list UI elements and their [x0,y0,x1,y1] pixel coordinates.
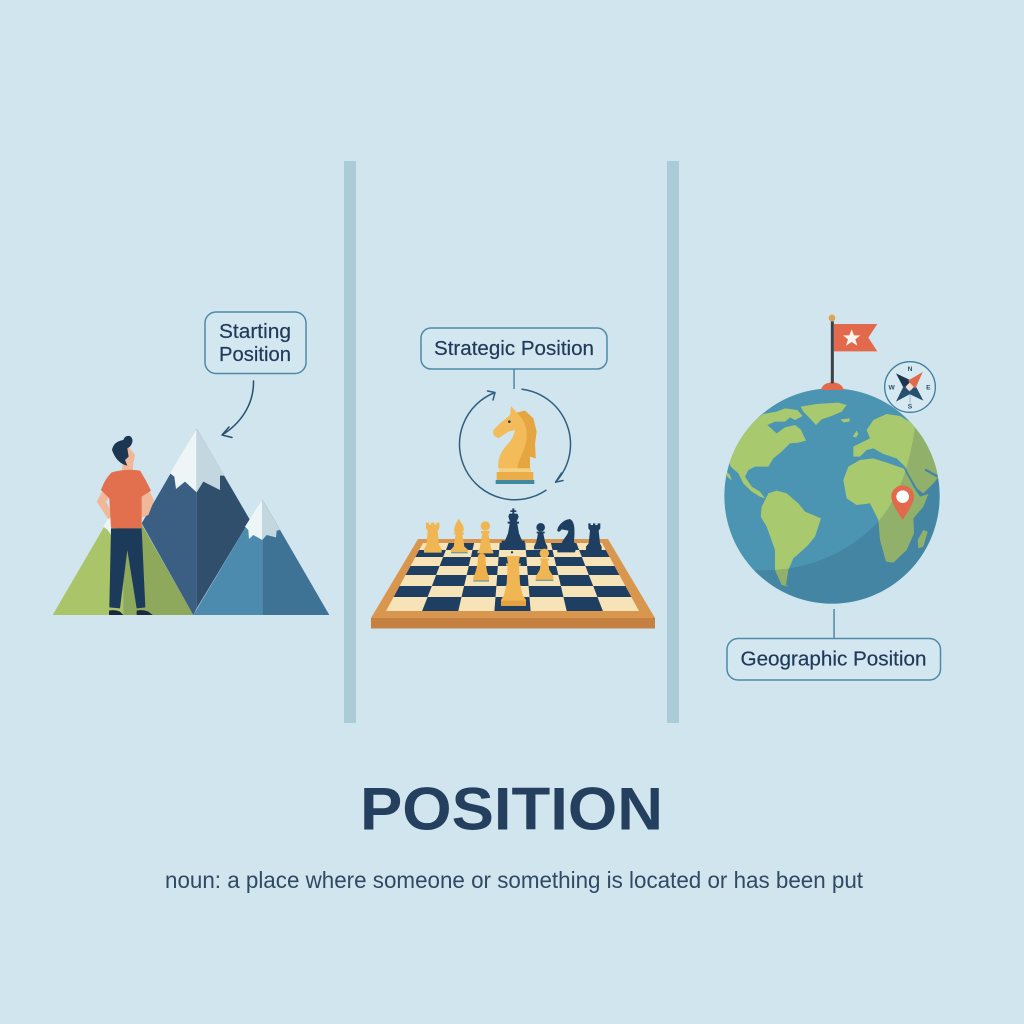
gold king front [501,551,526,606]
compass: S [908,404,913,411]
large dark mountain [142,428,250,615]
chess pieces: navy and front gold [501,508,602,606]
continents [725,403,940,587]
gold rook [424,523,442,553]
navy king [502,508,525,549]
chess board [371,539,655,628]
compass: W [889,384,896,391]
definition text: noun: a place where someone or something is located or has been put [165,867,864,893]
label: starting position: Starting [219,320,291,343]
gold pawn back [477,521,493,553]
globe shadow [754,428,940,604]
map pin [891,485,914,520]
mountain range illustration [53,428,329,615]
panel: starting position [53,312,329,615]
label: geographic position: Geographic Position [740,648,926,670]
person looking at peak [97,436,154,615]
connector line [833,609,835,638]
icon: golden knight [493,406,537,484]
gold bishop [451,519,468,553]
panel: strategic position [371,328,655,628]
gold pawn front right [536,549,553,581]
arrow: label to peak [222,381,254,438]
panel: geographic position [724,315,950,680]
left divider [344,161,356,723]
flag [821,315,877,390]
globe illustration [724,315,950,610]
navy rook [586,523,602,551]
gold pawn front left [473,553,489,582]
navy pawn [534,523,547,549]
right divider [667,161,679,723]
label: strategic position: Strategic Position [434,338,594,360]
compass: E [926,384,931,391]
navy knight [557,519,576,552]
compass [885,362,935,412]
compass: N [908,366,913,373]
title: POSITION [360,776,663,842]
small teal mountain [193,499,329,615]
red sea and gulf [906,470,937,491]
circular arrows [459,389,570,500]
label: geographic position [727,638,940,680]
connector line [513,369,515,389]
ocean [724,388,940,604]
label: strategic position [421,328,607,369]
label: starting position: Position [219,343,291,366]
chess pieces: back left gold [424,519,493,582]
label: starting position [205,312,306,374]
green hill [53,497,193,615]
